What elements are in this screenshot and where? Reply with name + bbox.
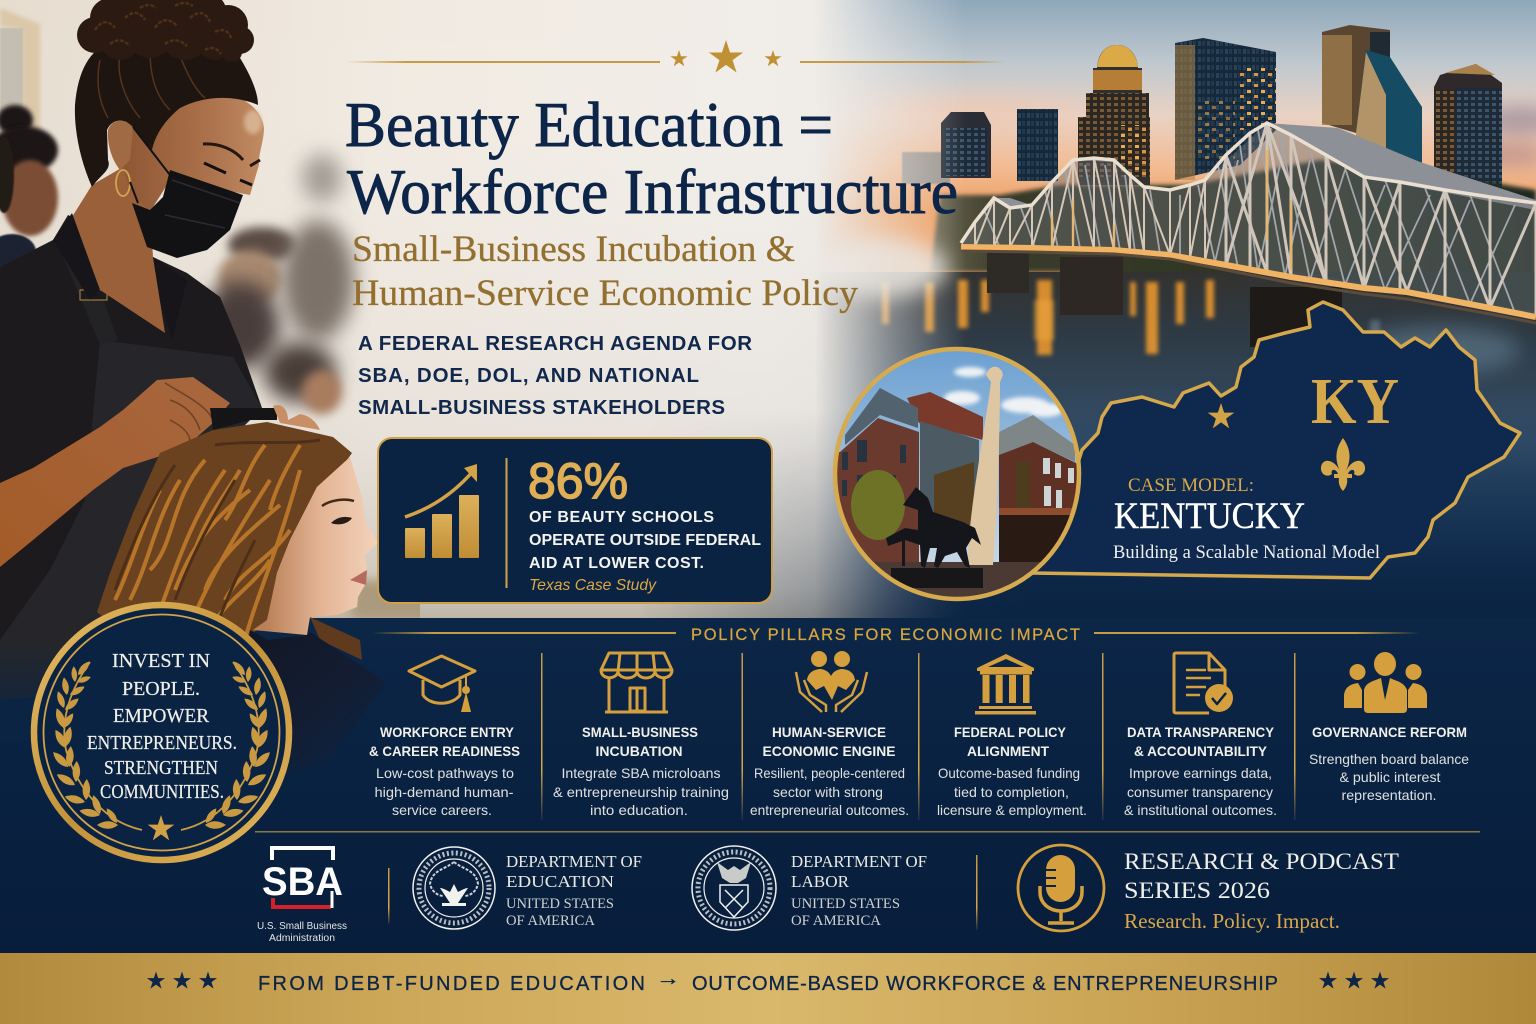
- pillar 3: human-service engine: Resilient, people-centered: [754, 765, 905, 781]
- pillar 6: governance reform: GOVERNANCE REFORM: [1312, 724, 1467, 740]
- laurel wreath: [50, 659, 273, 830]
- title: Workforce Infrastructure: [347, 157, 958, 227]
- warm light on bridge members: [1052, 150, 1291, 270]
- icon: document with check: [1174, 653, 1233, 713]
- badge: invest in people: [34, 605, 289, 860]
- top star ornament: [345, 40, 1005, 73]
- hair behind neck: [310, 617, 362, 660]
- map star: [1208, 403, 1234, 428]
- sky: [800, 0, 1536, 280]
- hair: [75, 42, 258, 187]
- icon: rising bar chart: [405, 464, 479, 558]
- sunset clouds: [870, 100, 1536, 165]
- icon: podcast microphone: [1018, 845, 1104, 931]
- photo: bat museum in circle: [830, 345, 1085, 605]
- seal: Department of Labor: [692, 846, 776, 930]
- pillar 3: human-service engine: [750, 651, 909, 818]
- subtitle: [352, 229, 858, 314]
- agenda text: A FEDERAL RESEARCH AGENDA FOR: [358, 332, 752, 355]
- text: Department of Labor: [791, 852, 927, 929]
- icon: government building: [975, 654, 1036, 714]
- icon: storefront: [601, 653, 672, 712]
- stylist arm and hand: [0, 377, 230, 567]
- bridge far-side members: [985, 130, 1515, 313]
- stylist torso: [0, 215, 262, 700]
- eyebrow and eyes: [203, 144, 260, 166]
- pillar 4: federal policy alignment: tied to completion,: [954, 784, 1069, 800]
- icon: people in hands: [796, 651, 867, 712]
- pillar 2: small-business incubation: SMALL-BUSINESS: [582, 724, 698, 740]
- badge text: ENTREPRENEURS.: [87, 732, 237, 754]
- agenda text: SBA, DOE, DOL, AND NATIONAL: [358, 364, 699, 387]
- page background: [0, 0, 1536, 640]
- lit bridge deck: [961, 247, 1536, 317]
- left stars: [147, 972, 217, 989]
- badge text: STRENGTHEN: [104, 757, 218, 779]
- pillar 1: workforce entry: WORKFORCE ENTRY: [380, 724, 515, 740]
- hair highlights: [115, 445, 300, 640]
- cape: [240, 630, 386, 780]
- text: Department of Labor: UNITED STATES: [791, 896, 900, 912]
- client-side fingers: [273, 405, 320, 430]
- pillar 6: governance reform: & public interest: [1340, 769, 1441, 785]
- badge text: PEOPLE.: [122, 678, 200, 700]
- photo: stylist: [0, 0, 264, 700]
- case label: CASE MODEL:: [1128, 475, 1254, 496]
- podcast text: [1124, 849, 1399, 933]
- text: Department of Education: EDUCATION: [506, 872, 614, 891]
- badge text: COMMUNITIES.: [100, 781, 224, 803]
- horizon haze: [808, 238, 948, 298]
- pillar 1: workforce entry: [369, 656, 520, 818]
- pillar 3: human-service engine: entrepreneurial outcomes.: [750, 802, 909, 818]
- logo: SBA: U.S. Small Business: [257, 921, 347, 932]
- podcast text: SERIES 2026: [1124, 878, 1270, 903]
- navy lower panel: [0, 618, 1536, 954]
- logo: SBA: Administration: [269, 933, 335, 944]
- skyline buildings: [902, 25, 1502, 190]
- banner text: →: [656, 968, 680, 990]
- pillar 1: workforce entry: & CAREER READINESS: [369, 743, 520, 759]
- right stars: [1319, 972, 1389, 989]
- bridge back truss: [1267, 123, 1536, 210]
- navy fade over river: [660, 432, 1536, 618]
- banner text: [258, 968, 1278, 995]
- comb: [210, 408, 277, 430]
- right truss members: [1226, 123, 1536, 317]
- pillar dividers: [541, 653, 1296, 820]
- bottom banner: [0, 953, 1536, 1024]
- stat callout: 86%: [378, 438, 772, 603]
- stat description: [529, 509, 761, 572]
- logo: SBA: SBA: [262, 860, 343, 904]
- hair bun: [77, 0, 254, 62]
- text: Department of Education: OF AMERICA: [506, 913, 596, 929]
- text: Department of Labor: LABOR: [791, 872, 850, 891]
- bridge top chord: [961, 123, 1536, 243]
- stylist neck: [72, 160, 165, 333]
- stat description: OF BEAUTY SCHOOLS: [529, 509, 714, 526]
- pillar 4: federal policy alignment: [937, 654, 1087, 818]
- pillar 1: workforce entry: Low-cost pathways to: [376, 765, 514, 781]
- pillar 1: workforce entry: service careers.: [392, 802, 492, 818]
- pillar 5: data transparency: Improve earnings data,: [1129, 765, 1272, 781]
- panel: Kentucky map: [1031, 302, 1520, 578]
- pillar 2: small-business incubation: Integrate SBA microloans: [562, 765, 720, 781]
- client hair: [97, 422, 352, 650]
- text: Department of Labor: DEPARTMENT OF: [791, 852, 927, 871]
- earring: [116, 170, 130, 196]
- pillar 2: small-business incubation: & entrepreneurship training: [553, 784, 729, 800]
- pillar 4: federal policy alignment: licensure & employment.: [937, 802, 1087, 818]
- pillar 4: federal policy alignment: Outcome-based funding: [938, 765, 1080, 781]
- podcast text: Research. Policy. Impact.: [1124, 909, 1340, 933]
- agenda text: [358, 332, 752, 419]
- pillar 6: governance reform: Strengthen board balance: [1309, 751, 1469, 767]
- case tagline: Building a Scalable National Model: [1113, 542, 1380, 563]
- photo: client: [97, 405, 386, 780]
- apron: [0, 340, 262, 700]
- photo: city skyline and bridge: [800, 0, 1536, 632]
- stat description: OPERATE OUTSIDE FEDERAL: [529, 532, 761, 549]
- vertical divider: [976, 855, 978, 930]
- bridge: [961, 123, 1536, 347]
- title: [345, 90, 958, 227]
- state name: KENTUCKY: [1114, 496, 1305, 537]
- pillar 5: data transparency: & ACCOUNTABILITY: [1134, 743, 1268, 759]
- vertical divider: [388, 868, 390, 924]
- pillar 4: federal policy alignment: FEDERAL POLICY: [954, 724, 1067, 740]
- pillar 2: small-business incubation: [553, 653, 729, 818]
- pillar 3: human-service engine: ECONOMIC ENGINE: [762, 743, 896, 759]
- pillar 2: small-business incubation: INCUBATION: [596, 743, 682, 759]
- text: Department of Labor: OF AMERICA: [791, 913, 882, 929]
- stat description: AID AT LOWER COST.: [529, 555, 704, 572]
- stat source: Texas Case Study: [529, 577, 657, 594]
- pillar 4: federal policy alignment: ALIGNMENT: [967, 743, 1049, 759]
- photo: blurred salon background: [0, 8, 442, 620]
- riverside trees and shore: [930, 157, 1536, 272]
- pillar 2: small-business incubation: into education.: [590, 802, 688, 818]
- icon: graduation cap: [409, 656, 475, 712]
- shirt collar: [53, 213, 187, 340]
- text: Department of Education: [506, 852, 642, 929]
- face mask: [132, 170, 243, 258]
- agenda text: SMALL-BUSINESS STAKEHOLDERS: [358, 396, 725, 419]
- reflections: [882, 280, 1214, 355]
- pillar 3: human-service engine: HUMAN-SERVICE: [772, 724, 886, 740]
- river: [800, 272, 1536, 632]
- badge text: EMPOWER: [113, 705, 210, 727]
- pillar 1: workforce entry: high-demand human-: [374, 784, 514, 800]
- pillar 5: data transparency: [1124, 653, 1277, 818]
- icon: leadership group: [1344, 652, 1427, 713]
- pillar 6: governance reform: [1309, 652, 1469, 803]
- stat number: 86%: [528, 453, 628, 509]
- icon: fleur-de-lis: [1321, 438, 1365, 491]
- left truss members: [975, 155, 1226, 261]
- text: Department of Education: UNITED STATES: [506, 896, 614, 912]
- KY monogram: KY: [1311, 365, 1399, 438]
- pillar 6: governance reform: representation.: [1342, 787, 1436, 803]
- divider line above logos: [255, 831, 1480, 832]
- pillar 5: data transparency: consumer transparency: [1127, 784, 1273, 800]
- logo: SBA: [257, 848, 347, 944]
- stylist head: [75, 0, 264, 258]
- client face: [253, 457, 378, 635]
- pillar 5: data transparency: DATA TRANSPARENCY: [1127, 724, 1275, 740]
- pillar 5: data transparency: & institutional outcomes.: [1124, 802, 1277, 818]
- subtitle: Small-Business Incubation &: [352, 229, 795, 270]
- subtitle: Human-Service Economic Policy: [352, 273, 858, 314]
- section heading: policy pillars: POLICY PILLARS FOR ECONOMIC IMPACT: [691, 626, 1080, 644]
- ear: [108, 121, 133, 170]
- fade stylist into navy: [0, 640, 250, 740]
- badge text: INVEST IN: [112, 650, 210, 672]
- banner text: OUTCOME-BASED WORKFORCE & ENTREPRENEURSHIP: [692, 973, 1278, 995]
- seal: Department of Education: [413, 847, 495, 929]
- pillar 3: human-service engine: sector with strong: [773, 784, 883, 800]
- podcast text: RESEARCH & PODCAST: [1124, 849, 1399, 874]
- text: Department of Education: DEPARTMENT OF: [506, 852, 642, 871]
- banner text: FROM DEBT-FUNDED EDUCATION: [258, 973, 645, 995]
- badge text: [87, 650, 237, 803]
- client brow, eye and lips: [322, 500, 354, 506]
- piers: [987, 250, 1029, 293]
- title: Beauty Education =: [345, 90, 833, 160]
